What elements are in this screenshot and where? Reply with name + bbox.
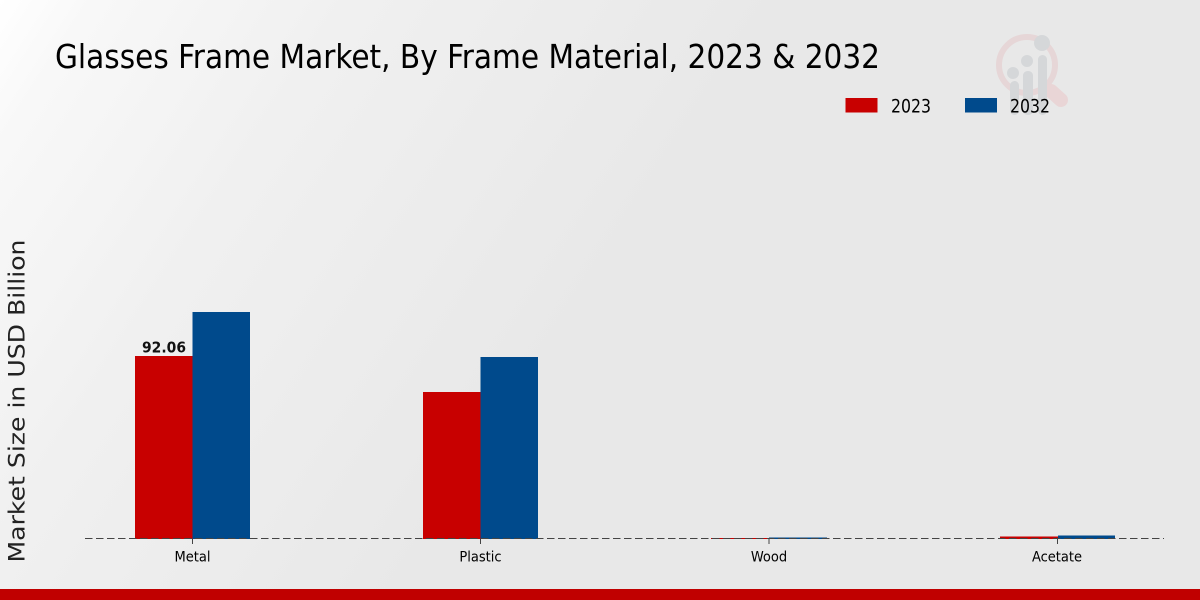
legend item: 2023 xyxy=(846,96,931,118)
x axis labels: Wood xyxy=(751,550,787,566)
legend item: 2032 xyxy=(965,96,1050,118)
x axis labels: Metal xyxy=(174,550,211,566)
x axis labels: Plastic xyxy=(459,550,502,566)
legend item: 2032: 2032 xyxy=(1010,96,1050,118)
x axis baseline xyxy=(85,538,1164,544)
group: Acetate xyxy=(1000,536,1115,539)
footer bar xyxy=(0,589,1200,600)
x axis labels xyxy=(174,550,1082,566)
legend item: 2023: 2023 xyxy=(891,96,931,118)
bar chart xyxy=(135,312,1115,539)
value label: 92.06 xyxy=(142,338,186,356)
x axis labels: Acetate xyxy=(1032,550,1082,566)
icon: watermark logo xyxy=(999,35,1061,115)
group: Wood xyxy=(711,538,827,539)
title: Glasses Frame Market, By Frame Material, 2023 & 2032 xyxy=(55,37,880,76)
legend xyxy=(846,96,1050,118)
y axis label: Market Size in USD Billion xyxy=(4,240,30,562)
group: Metal xyxy=(135,312,250,539)
group: Plastic xyxy=(423,357,538,539)
